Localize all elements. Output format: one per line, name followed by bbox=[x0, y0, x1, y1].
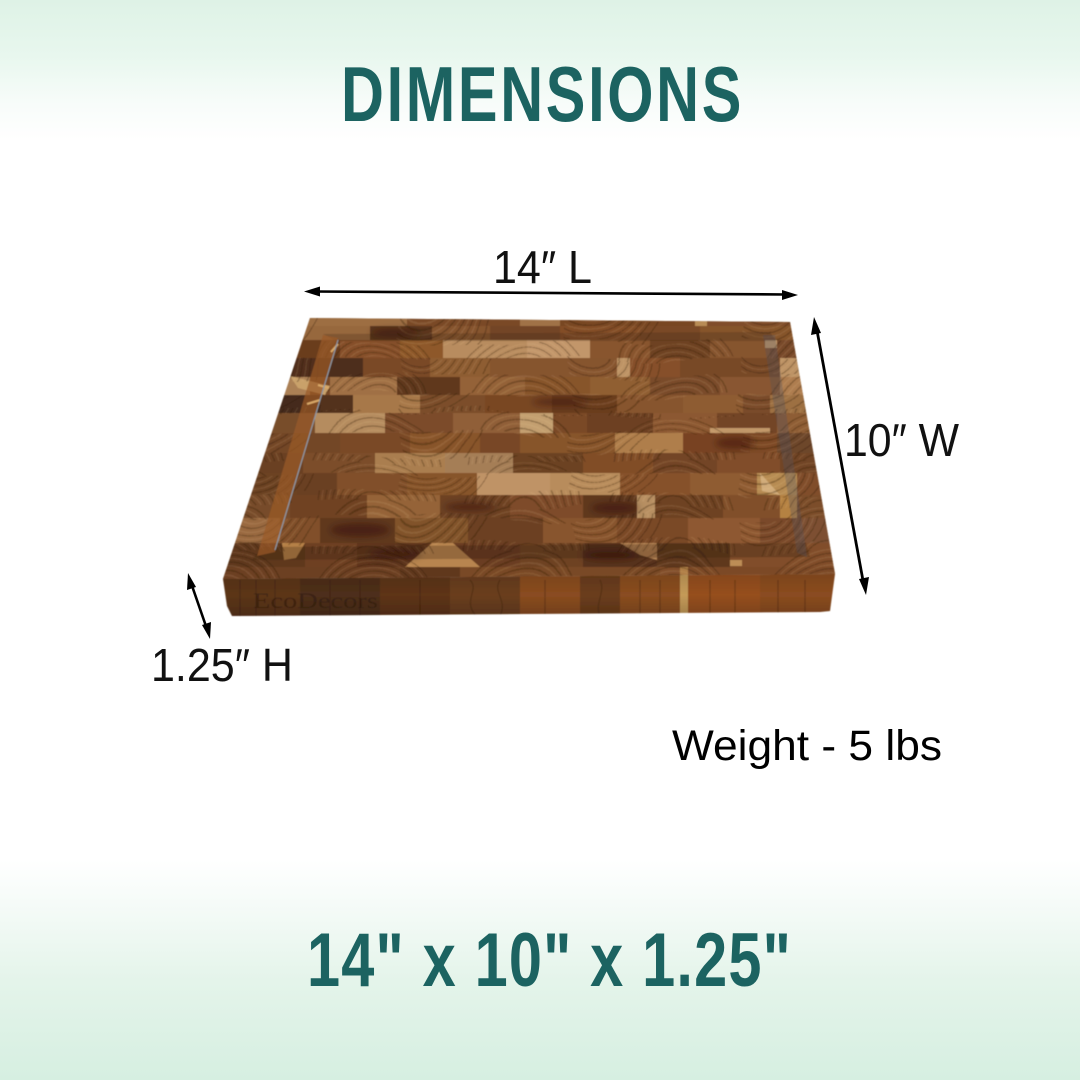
juice groove bbox=[252, 332, 810, 560]
arrow: height bbox=[187, 573, 211, 639]
dimension label: height: 1.25″ H bbox=[151, 639, 293, 691]
title: DIMENSIONS bbox=[341, 50, 744, 138]
board top surface bbox=[220, 316, 840, 586]
arrow: length bbox=[304, 286, 798, 300]
bottom size summary: 14" x 10" x 1.25" bbox=[307, 918, 792, 1003]
light accent blocks bbox=[282, 340, 780, 567]
weight text: Weight - 5 lbs bbox=[672, 722, 942, 770]
warm tone wash bbox=[220, 316, 840, 586]
dark knots and streaks bbox=[330, 329, 755, 560]
arrow: width bbox=[811, 317, 869, 595]
dimension label: width: 10″ W bbox=[844, 414, 960, 466]
wood grain overlays bbox=[220, 316, 840, 583]
dimension label: length: 14″ L bbox=[493, 241, 592, 293]
cutting board image bbox=[220, 316, 840, 618]
engraved logo: EcoDecors bbox=[253, 588, 378, 613]
board front face bbox=[220, 572, 840, 618]
